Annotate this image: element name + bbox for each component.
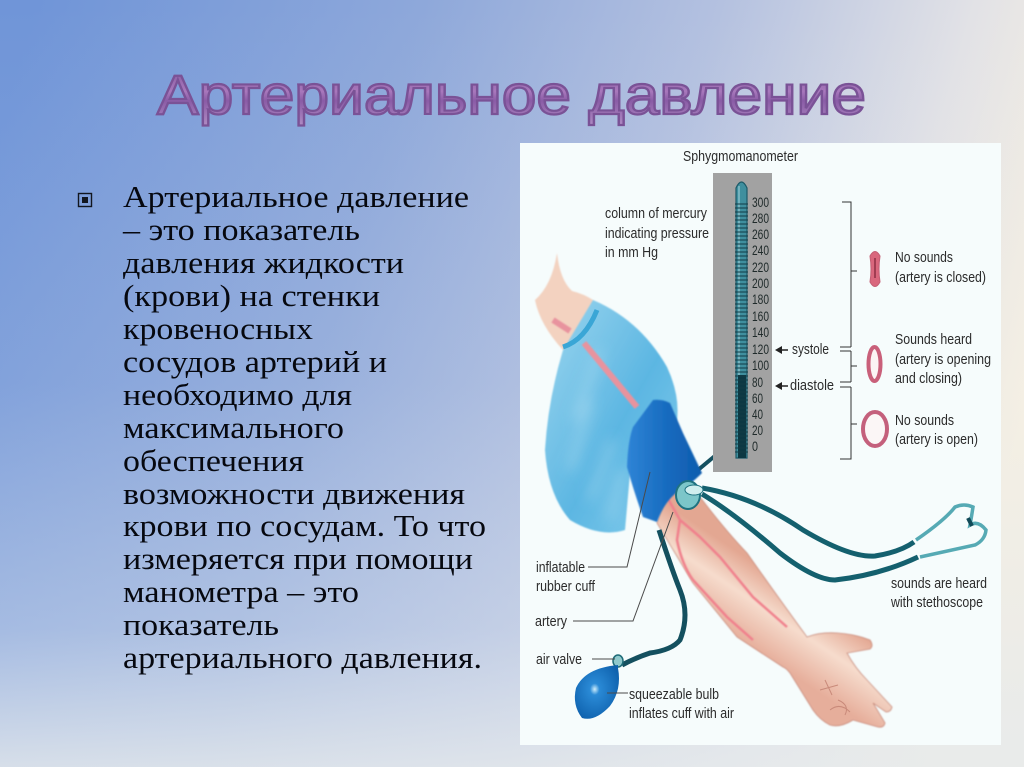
body text: артериального давления.: [123, 640, 482, 675]
icon: open artery: [863, 412, 887, 446]
arrow and label: systole: [775, 341, 829, 358]
body text: давления жидкости: [123, 245, 404, 280]
title: Артериальное давление: [157, 63, 866, 126]
label: inflatable rubber cuff: rubber cuff: [536, 578, 596, 595]
sphygmomanometer scale: 160: [752, 309, 769, 324]
tube to sphygmomanometer: [698, 455, 716, 470]
heading: Sphygmomanometer: Sphygmomanometer: [683, 148, 798, 165]
label: air valve: air valve: [536, 651, 582, 668]
illustration: inflatable cuff: [627, 400, 702, 522]
body text: необходимо для: [123, 377, 352, 412]
sphygmomanometer scale: 100: [752, 358, 769, 373]
illustration: upper arm artery: [553, 320, 637, 407]
arrow and label: systole: systole: [792, 341, 829, 358]
sphygmomanometer scale: 280: [752, 211, 769, 226]
body text: возможности движения: [123, 476, 465, 511]
label: inflatable rubber cuff: [536, 559, 596, 595]
label: squeezable bulb: [629, 686, 734, 722]
sphygmomanometer scale: 120: [752, 342, 769, 357]
sphygmomanometer scale: [713, 173, 772, 472]
sphygmomanometer scale: 0: [752, 439, 758, 454]
label: column of mercury: indicating pressure: [605, 225, 709, 242]
label: no sounds, artery open: [895, 412, 978, 448]
sphygmomanometer scale: 80: [752, 375, 763, 390]
sphygmomanometer scale: 240: [752, 243, 769, 258]
body text: измеряется при помощи: [123, 541, 473, 576]
body text: крови по сосудам. То что: [123, 508, 486, 543]
body text: максимального: [123, 410, 344, 445]
label: squeezable bulb: inflates cuff with air: [629, 705, 734, 722]
label: no sounds, artery open: No sounds: [895, 412, 954, 429]
body text: (крови) на стенки: [123, 278, 380, 313]
sphygmomanometer scale: 20: [752, 423, 763, 438]
body text: сосудов артерий и: [123, 344, 387, 379]
illustration: air valve: [613, 655, 623, 667]
label: no sounds, artery closed: No sounds: [895, 249, 953, 266]
sphygmomanometer scale: 40: [752, 407, 763, 422]
label: stethoscope: with stethoscope: [890, 594, 983, 611]
body text: обеспечения: [123, 443, 304, 478]
label: no sounds, artery open: (artery is open): [895, 431, 978, 448]
label: column of mercury: [605, 205, 709, 261]
illustration: shirt sleeve: [545, 300, 678, 532]
sphygmomanometer scale: 60: [752, 391, 763, 406]
label: no sounds, artery closed: [895, 249, 986, 286]
illustration: shirt folds: [570, 350, 622, 520]
illustration: forearm arteries: [667, 497, 787, 640]
sphygmomanometer scale: 260: [752, 227, 769, 242]
illustration: palm creases: [820, 680, 850, 715]
illustration: stethoscope chest piece: [676, 481, 703, 509]
sphygmomanometer scale: 200: [752, 276, 769, 291]
label: artery: artery: [535, 613, 567, 630]
body text: – это показатель: [122, 212, 360, 247]
label: sounds heard: (artery is opening: [895, 351, 991, 368]
label: sounds heard: [895, 331, 991, 387]
icon: partly open artery: [868, 347, 880, 381]
arrow and label: diastole: diastole: [790, 377, 834, 394]
body text: Артериальное давление: [123, 179, 469, 214]
label: stethoscope: [890, 575, 987, 611]
label: sounds heard: Sounds heard: [895, 331, 972, 348]
illustration: shirt collar: [563, 310, 597, 347]
icon: closed artery: [870, 252, 880, 286]
body text: [122, 179, 486, 675]
body text: манометра – это: [123, 574, 359, 609]
illustration: forearm and hand: [657, 478, 892, 727]
illustration: bulb tube: [622, 530, 685, 665]
leader lines: [573, 472, 673, 693]
arrow and label: diastole: [775, 377, 834, 394]
sphygmomanometer scale: 220: [752, 260, 769, 275]
brackets: [840, 202, 857, 459]
illustration: neck skin: [535, 253, 597, 350]
sphygmomanometer scale: 300: [752, 195, 769, 210]
label: squeezable bulb: squeezable bulb: [629, 686, 719, 703]
label: inflatable rubber cuff: inflatable: [536, 559, 585, 576]
label: stethoscope: sounds are heard: [891, 575, 987, 592]
illustration: stethoscope tubes: [702, 488, 986, 580]
panel: blood pressure diagram: [520, 143, 1001, 745]
label: sounds heard: and closing): [895, 370, 962, 387]
body text: показатель: [123, 607, 279, 642]
label: column of mercury: in mm Hg: [605, 244, 658, 261]
label: no sounds, artery closed: (artery is closed): [895, 269, 986, 286]
body text: кровеносных: [123, 311, 314, 346]
sphygmomanometer scale: 140: [752, 325, 769, 340]
illustration: squeezable bulb: [575, 665, 619, 719]
label: column of mercury: column of mercury: [605, 205, 707, 222]
sphygmomanometer scale: 180: [752, 292, 769, 307]
bullet icon: [78, 194, 92, 206]
